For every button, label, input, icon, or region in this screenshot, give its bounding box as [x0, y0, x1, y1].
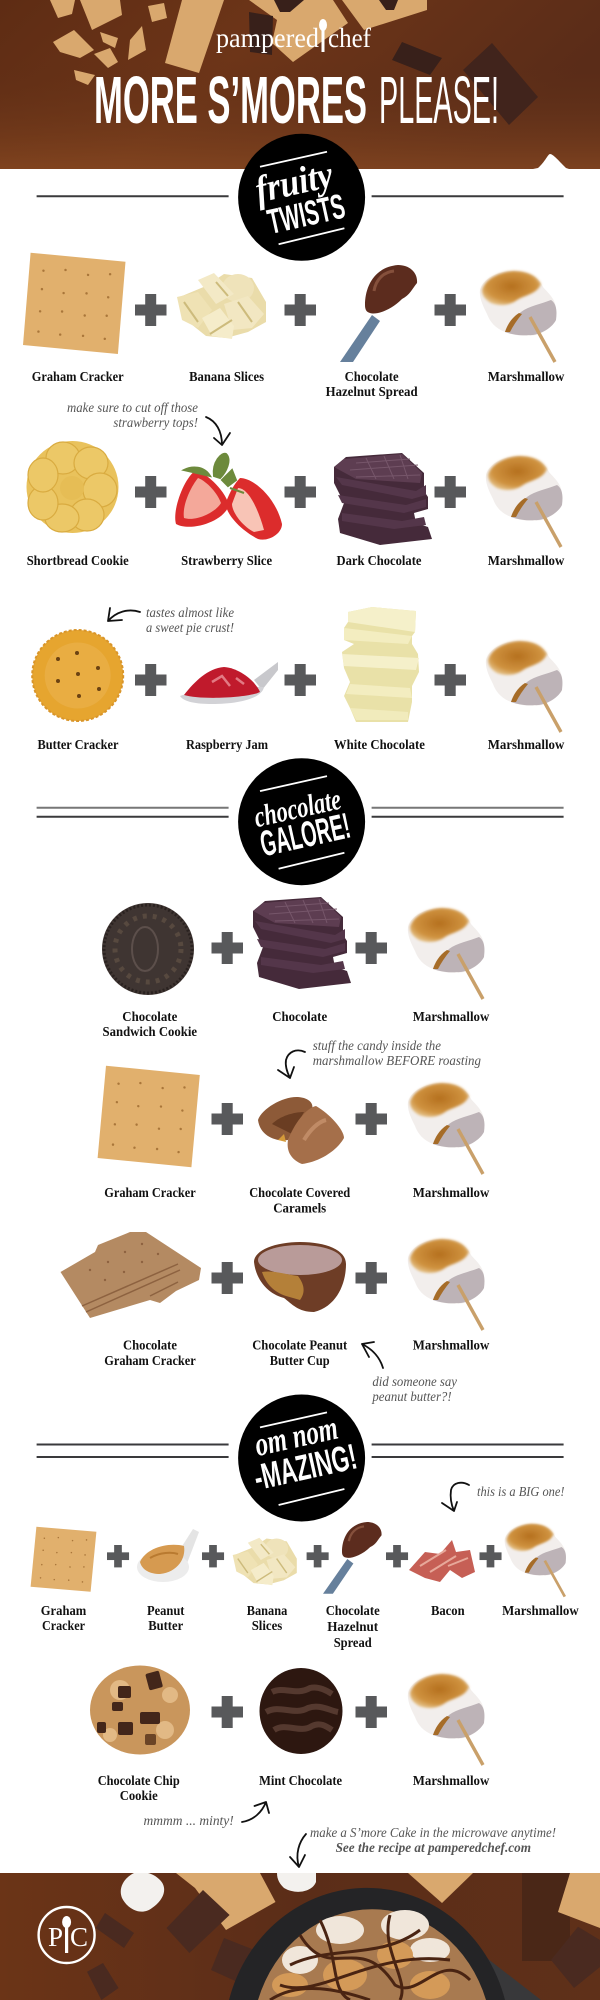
panel: chocolate galore section header: chocolate: [251, 783, 344, 834]
icon: chocolate pieces: [249, 0, 538, 125]
icon: chocolate hazelnut spread: [340, 265, 417, 362]
label: chocolate peanut butter cup: [252, 1338, 347, 1369]
icon: strawberry slice: [175, 454, 282, 540]
panel: om nom -mazing section header: [37, 1394, 564, 1522]
icon: plus: [135, 294, 166, 326]
label: chocolate hazelnut spread: Chocolate: [326, 1604, 380, 1619]
icon: plus: [212, 1103, 243, 1135]
label: chocolate: Chocolate: [272, 1010, 327, 1025]
icon: chocolate pieces: [87, 1890, 600, 2000]
arrow: to peanut butter cup: [362, 1342, 383, 1368]
label: chocolate sandwich cookie: Chocolate: [122, 1010, 177, 1025]
panel: footer photo: [0, 1873, 600, 2000]
label: peanut butter: Peanut: [147, 1604, 185, 1619]
label: banana slices: [247, 1604, 287, 1634]
label: chocolate graham cracker: Chocolate: [123, 1338, 177, 1354]
logo: pampered chef: [216, 19, 371, 53]
label: graham cracker: Graham: [41, 1604, 87, 1619]
icon: chocolate hazelnut spread small: [323, 1522, 382, 1594]
label: marshmallow: Marshmallow: [413, 1186, 490, 1201]
note: strawberry tops: strawberry tops!: [113, 415, 198, 430]
icon: marshmallow: [486, 456, 562, 547]
label: raspberry jam: Raspberry Jam: [186, 738, 268, 753]
icon: marshmallows: [121, 1873, 316, 1912]
icon: plus: [356, 1103, 387, 1135]
note: strawberry tops: [67, 400, 198, 430]
icon: plus: [356, 1696, 387, 1728]
icon: marshmallow small: [505, 1524, 566, 1597]
label: chocolate hazelnut spread: Hazelnut: [327, 1620, 379, 1635]
icon: graham crackers: [176, 1873, 600, 1930]
icon: plus: [307, 1545, 329, 1567]
icon: plus: [434, 476, 466, 508]
icon: marshmallow: [408, 1239, 484, 1330]
label: mint chocolate: Mint Chocolate: [259, 1774, 342, 1789]
icon: shortbread cookie: [26, 441, 118, 533]
icon: marshmallow: [480, 271, 556, 362]
icon: plus: [284, 664, 316, 696]
label: chocolate chip cookie: [98, 1774, 180, 1804]
label: graham cracker: Cracker: [42, 1619, 85, 1634]
label: chocolate hazelnut spread: [326, 1604, 380, 1651]
icon: chocolate stack: [253, 897, 351, 989]
icon: plus: [135, 476, 166, 508]
arrow: to strawberry: [206, 417, 230, 445]
label: shortbread cookie: Shortbread Cookie: [27, 554, 129, 569]
icon: s'more cake dish: [229, 1888, 541, 2000]
label: graham cracker: [41, 1604, 87, 1634]
icon: marshmallow: [408, 1083, 484, 1174]
logo: PC spoon circle: C: [70, 1922, 88, 1952]
icon: plus: [135, 664, 166, 696]
label: chocolate graham cracker: [104, 1338, 196, 1369]
label: chocolate hazelnut spread: Hazelnut Spread: [326, 385, 418, 400]
label: chocolate chip cookie: Cookie: [120, 1789, 158, 1804]
arrow: to footer photo: [290, 1834, 306, 1867]
logo: PC spoon circle: P: [48, 1922, 63, 1952]
note: s'more cake recipe: See the recipe at pamperedchef.com: [336, 1840, 531, 1855]
label: banana slices: Banana: [247, 1604, 287, 1619]
note: peanut butter: [371, 1374, 457, 1404]
label: dark chocolate: Dark Chocolate: [336, 554, 422, 569]
panel: chocolate galore section header: [37, 758, 564, 885]
panel: header photo: [0, 0, 600, 170]
label: strawberry slice: Strawberry Slice: [181, 554, 272, 569]
note: peanut butter: did someone say: [372, 1374, 457, 1389]
panel: fruity twists section header: [37, 134, 564, 261]
label: marshmallow: Marshmallow: [413, 1774, 490, 1789]
icon: chocolate covered caramels: [258, 1097, 344, 1164]
label: marshmallow: Marshmallow: [413, 1338, 490, 1354]
note: sweet pie crust: [146, 605, 234, 635]
label: marshmallow: Marshmallow: [488, 370, 565, 385]
icon: chocolate graham cracker: [60, 1232, 201, 1318]
icon: banana slices: [177, 273, 266, 339]
panel: fruity twists section header: TWISTS: [264, 187, 349, 242]
note: peanut butter: peanut butter?!: [371, 1389, 452, 1404]
panel: chocolate galore section header: GALORE!: [256, 805, 354, 864]
icon: white chocolate: [342, 607, 419, 722]
logo: PC spoon circle: [39, 1907, 95, 1963]
label: chocolate peanut butter cup: Chocolate Peanut: [252, 1338, 347, 1354]
note: sweet pie crust: tastes almost like: [146, 605, 234, 620]
panel: om nom -mazing section header: -MAZING!: [250, 1436, 360, 1498]
icon: raspberry jam: [180, 662, 278, 704]
label: butter cracker: Butter Cracker: [38, 738, 118, 753]
icon: plus: [356, 1262, 387, 1294]
arrow: to butter cracker: [108, 608, 140, 621]
icon: dark chocolate: [334, 453, 432, 545]
label: chocolate sandwich cookie: Sandwich Cookie: [103, 1025, 197, 1040]
label: marshmallow: Marshmallow: [502, 1604, 579, 1619]
label: bacon: Bacon: [431, 1604, 465, 1619]
icon: plus: [284, 476, 316, 508]
label: peanut butter: Butter: [148, 1619, 183, 1634]
icon: plus: [356, 932, 387, 964]
icon: plus: [107, 1545, 129, 1567]
panel: fruity twists section header: fruity: [251, 154, 337, 212]
label: white chocolate: White Chocolate: [334, 738, 425, 753]
label: banana slices: Slices: [252, 1619, 283, 1634]
icon: plus: [434, 294, 466, 326]
note: minty: mmmm ... minty!: [144, 1813, 234, 1828]
arrow: to caramels: [278, 1050, 305, 1078]
label: graham cracker: Graham Cracker: [32, 370, 124, 385]
label: marshmallow: Marshmallow: [488, 554, 565, 569]
icon: chocolate sandwich cookie: [102, 903, 194, 995]
note: sweet pie crust: a sweet pie crust!: [146, 620, 234, 635]
icon: butter cracker: [32, 630, 123, 721]
label: chocolate graham cracker: Graham Cracker: [104, 1354, 196, 1369]
label: chocolate hazelnut spread: Chocolate: [345, 370, 399, 385]
note: s'more cake recipe: [310, 1825, 556, 1855]
label: chocolate covered caramels: Caramels: [273, 1202, 327, 1216]
icon: plus: [212, 1262, 243, 1294]
label: chocolate hazelnut spread: Spread: [334, 1636, 372, 1651]
icon: plus: [212, 932, 243, 964]
label: marshmallow: Marshmallow: [413, 1010, 490, 1025]
label: chocolate covered caramels: [249, 1186, 350, 1216]
icon: plus: [386, 1545, 408, 1567]
arrow: big one: [442, 1483, 469, 1511]
note: strawberry tops: make sure to cut off those: [67, 400, 198, 415]
note: big one: this is a BIG one!: [477, 1484, 564, 1499]
label: chocolate chip cookie: Chocolate Chip: [98, 1774, 180, 1789]
icon: graham cracker: [23, 253, 126, 354]
icon: peanut butter spoon: [137, 1529, 199, 1582]
icon: chocolate peanut butter cup: [254, 1242, 346, 1312]
panel: om nom -mazing section header: om nom: [251, 1410, 341, 1464]
note: stuff the candy: stuff the candy inside the: [313, 1038, 441, 1053]
label: chocolate peanut butter cup: Butter Cup: [270, 1354, 330, 1369]
note: stuff the candy: marshmallow BEFORE roasting: [313, 1053, 481, 1068]
icon: graham cracker pieces: [50, 0, 427, 85]
icon: graham cracker small: [31, 1527, 96, 1592]
icon: plus: [434, 664, 466, 696]
note: s'more cake recipe: make a S’more Cake in the microwave anytime!: [310, 1825, 556, 1840]
icon: plus: [284, 294, 316, 326]
icon: mint chocolate: [260, 1668, 342, 1754]
logo: pampered chef: pampered: [216, 23, 319, 53]
icon: marshmallow: [486, 641, 562, 732]
label: chocolate sandwich cookie: [103, 1010, 197, 1040]
label: graham cracker: Graham Cracker: [104, 1186, 196, 1201]
logo: pampered chef: chef: [328, 23, 371, 53]
label: banana slices: Banana Slices: [189, 370, 265, 385]
icon: plus: [202, 1545, 224, 1567]
icon: marshmallow: [408, 908, 484, 999]
icon: plus: [212, 1696, 243, 1728]
arrow: to mint chocolate: [242, 1802, 269, 1822]
icon: bacon: [409, 1540, 475, 1582]
note: stuff the candy: [313, 1038, 481, 1068]
label: peanut butter: [147, 1604, 185, 1634]
icon: banana slices small: [233, 1538, 297, 1585]
icon: marshmallow: [408, 1674, 484, 1765]
label: marshmallow: Marshmallow: [488, 738, 565, 753]
icon: graham cracker: [98, 1066, 200, 1167]
label: chocolate covered caramels: Chocolate Covered: [249, 1186, 350, 1201]
label: chocolate hazelnut spread: [326, 370, 418, 400]
icon: plus: [480, 1545, 502, 1567]
icon: chocolate chip cookie: [90, 1666, 190, 1754]
